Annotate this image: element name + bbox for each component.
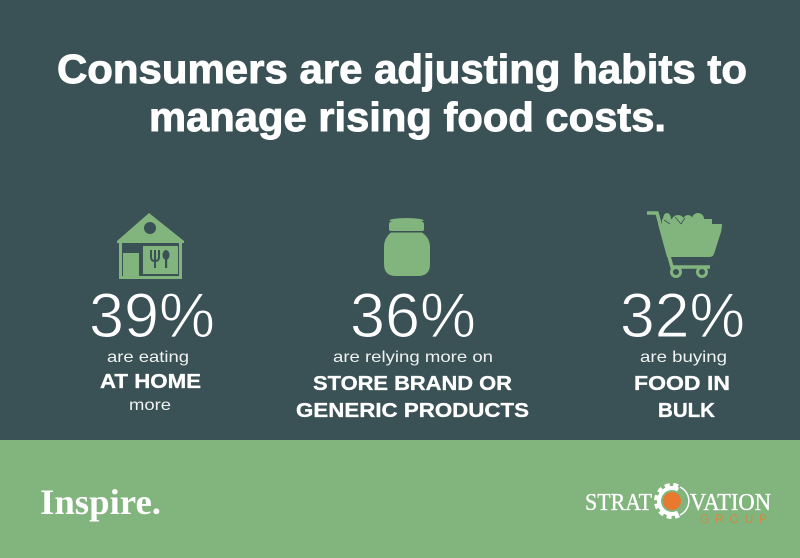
stat: store brand: are relying more on	[333, 349, 493, 366]
logo: Stratovation Group: VATION	[690, 490, 771, 516]
icon: shopping cart	[647, 213, 722, 276]
stat: store brand	[296, 281, 529, 422]
stat: buying in bulk: FOOD IN	[634, 373, 730, 395]
stat: buying in bulk: BULK	[658, 400, 716, 422]
stat: at home	[89, 281, 215, 414]
stat: store brand: STORE BRAND OR	[313, 373, 513, 395]
stat: buying in bulk	[620, 281, 745, 422]
icon: house with fork and spoon	[117, 213, 184, 278]
title	[57, 46, 747, 140]
stat: buying in bulk: 32%	[620, 281, 745, 351]
title: Consumers are adjusting habits to	[57, 46, 747, 92]
logo: Stratovation Group	[585, 485, 771, 526]
footer band	[0, 440, 800, 558]
icon: jar	[384, 218, 430, 276]
logo: Stratovation Group: GROUP	[700, 512, 767, 526]
stat: at home: 39%	[89, 281, 215, 351]
stat: store brand: 36%	[350, 281, 476, 351]
logo: Inspire: Inspire.	[40, 482, 161, 522]
stat: buying in bulk: are buying	[640, 349, 727, 366]
stat: at home: are eating	[107, 349, 189, 366]
icon: gear	[656, 485, 691, 517]
stat: at home: AT HOME	[100, 371, 201, 393]
stat: at home: more	[129, 397, 171, 414]
logo: Stratovation Group: STRAT	[585, 490, 652, 516]
stat: store brand: GENERIC PRODUCTS	[296, 400, 529, 422]
title: manage rising food costs.	[149, 94, 666, 140]
